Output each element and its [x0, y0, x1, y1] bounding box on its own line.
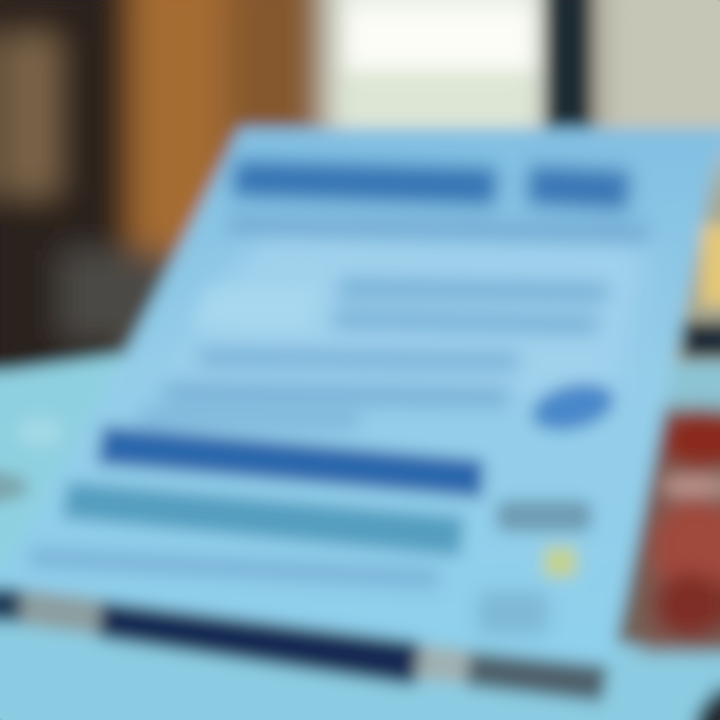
dark corner: [692, 682, 720, 720]
small text block bottom right: [478, 592, 548, 634]
hand at right: [640, 410, 720, 650]
document title: [232, 161, 630, 210]
yellow marker: [544, 547, 576, 577]
background: blurred room: [0, 0, 720, 400]
yellow background patch: [702, 225, 720, 305]
dark window post: [545, 0, 591, 150]
dark background bar: [682, 322, 720, 358]
gray label: [496, 500, 592, 532]
table surface: [0, 352, 720, 720]
faint subtitle line: [226, 216, 650, 242]
blue stamp: [527, 375, 619, 439]
pen on the document edge: [0, 587, 608, 702]
window: [345, 5, 535, 125]
teal bar: [62, 482, 464, 556]
faint text rows: [28, 278, 610, 588]
blue bar: [97, 426, 484, 498]
document sheet: [0, 128, 720, 662]
light panel: [190, 285, 320, 330]
